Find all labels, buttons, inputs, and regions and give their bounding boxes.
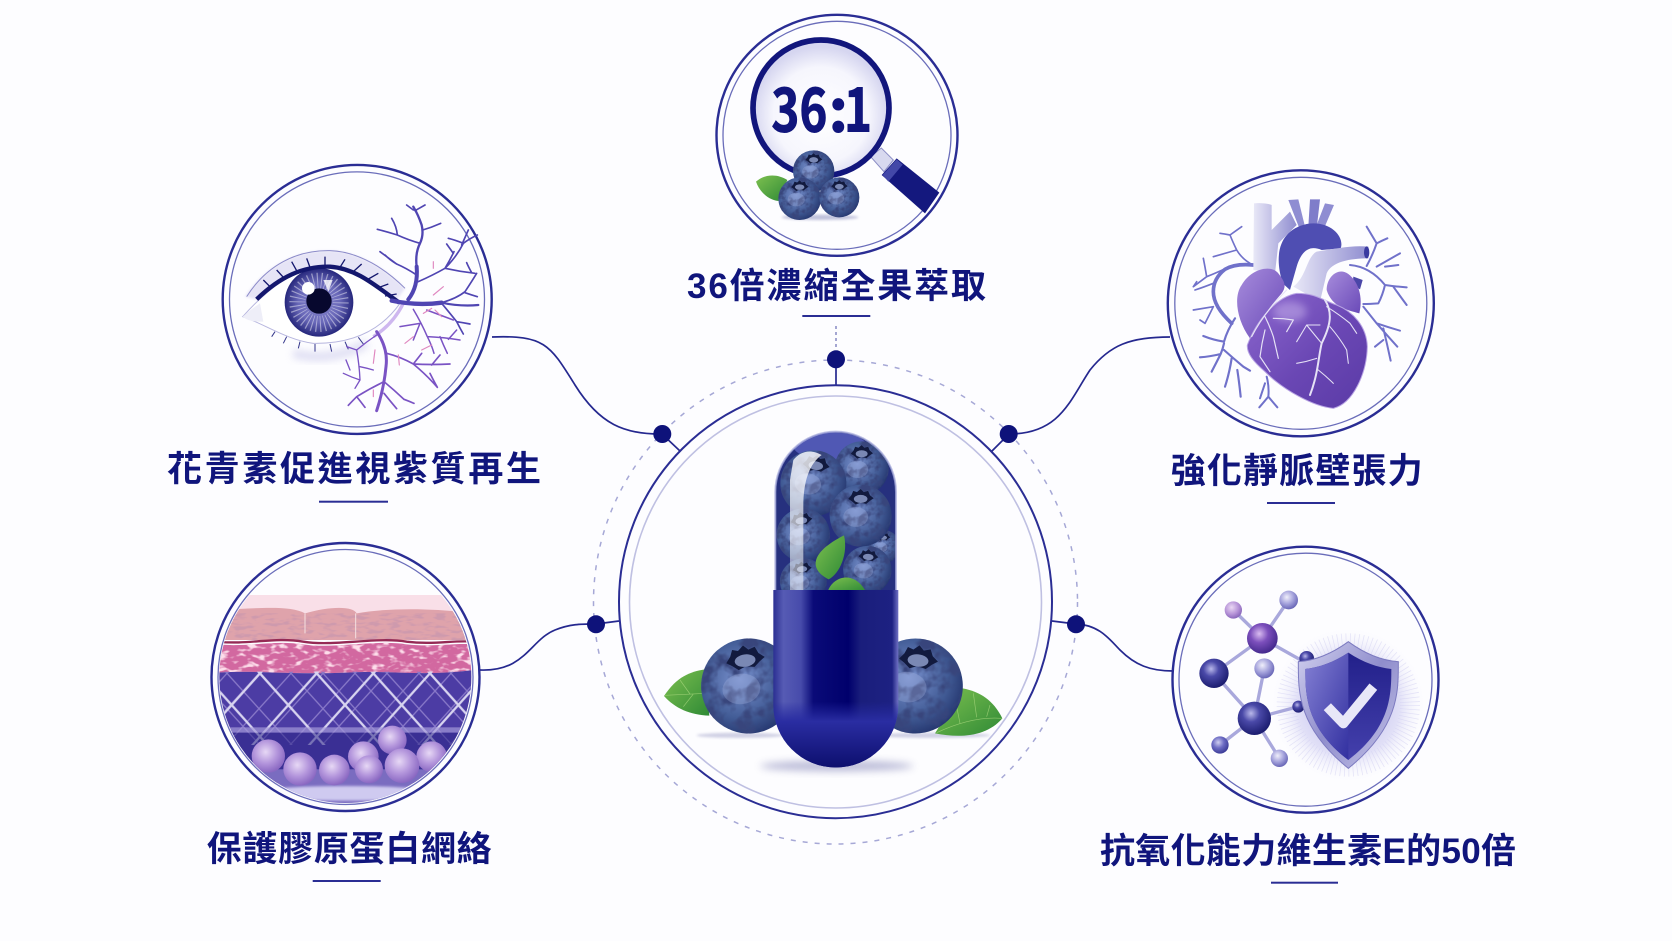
vessels <box>343 205 478 411</box>
panel: eye <box>167 165 541 503</box>
node dots <box>587 350 1085 633</box>
icon: magnifying glass <box>753 40 939 220</box>
panel: central capsule <box>587 350 1085 844</box>
icon: magnifying glass: 1 <box>844 63 872 149</box>
panel: antioxidant <box>1100 547 1516 884</box>
icon: magnifying glass: : <box>829 63 848 149</box>
icon: molecule and shield <box>1199 591 1427 783</box>
heading: 36x concentrate: 36倍濃縮全果萃取 <box>687 267 986 306</box>
icon: skin cross-section <box>217 595 477 806</box>
heading: anthocyanin: 花青素促進視紫質再生 <box>167 441 541 492</box>
icon: heart with vessels <box>1193 199 1407 408</box>
panel: 36:1 concentration <box>687 15 986 317</box>
heading: antioxidant 50x: 抗氧化能力維生素E的50倍 <box>1100 832 1516 871</box>
icon: magnifying glass: 36 <box>771 63 827 149</box>
icon: eye with retinal vessels <box>243 205 478 411</box>
panel: collagen skin <box>207 543 492 882</box>
heading: collagen: 保護膠原蛋白網絡 <box>207 821 492 872</box>
panel: heart <box>1168 170 1434 504</box>
connector lines <box>480 326 1173 671</box>
heading: vein wall: 強化靜脈壁張力 <box>1171 443 1423 494</box>
capsule with berries <box>664 430 1002 771</box>
